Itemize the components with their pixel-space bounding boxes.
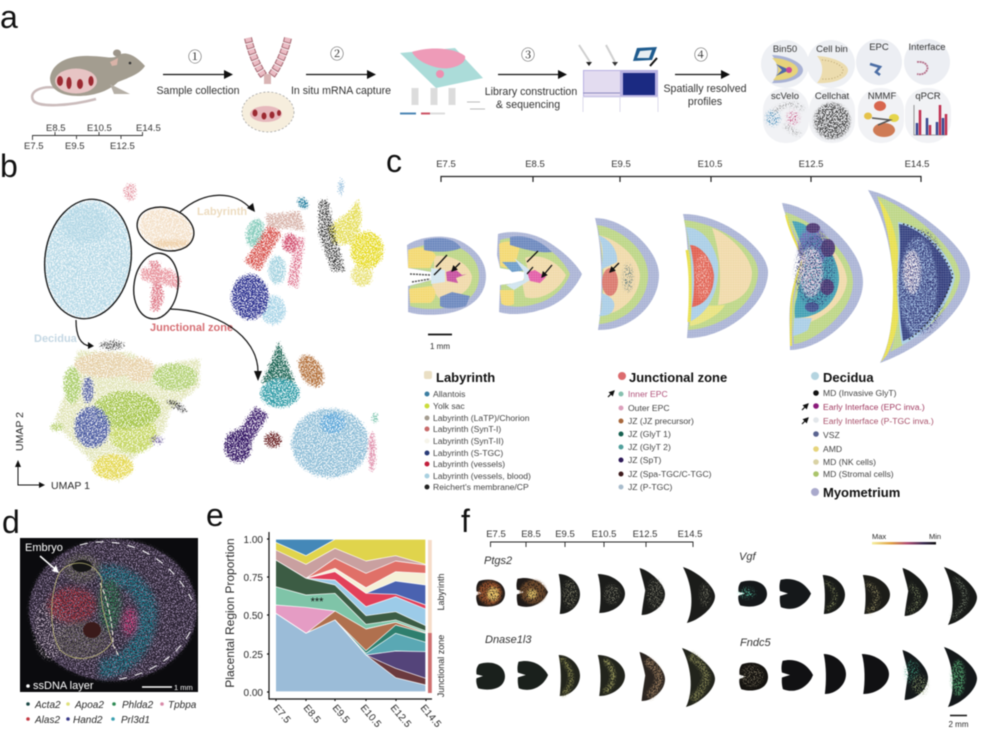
- gene row: Ptgs2: Ptgs2: [484, 555, 512, 567]
- panel: c stage sections: [386, 143, 970, 500]
- image: ssDNA section on black: [20, 538, 198, 692]
- thumbnail: scVelo: [766, 91, 803, 134]
- legend: Decidua and Myometrium: MD (Stromal cells): [823, 469, 894, 479]
- label: Junctional zone: Junctional zone: [150, 322, 233, 334]
- panel letter a: a: [0, 0, 18, 35]
- legend: Labyrinth: Labyrinth (S-TGC): [433, 448, 503, 458]
- thumbnail: Bin50: Bin50: [773, 44, 797, 55]
- axes and ticks: 0.00: [244, 688, 263, 699]
- thumbnail: Cell bin: Cell bin: [816, 44, 848, 55]
- legend: Labyrinth: [424, 370, 531, 492]
- scale bar 2 mm: 2 mm: [948, 720, 969, 729]
- umap: main overview: [35, 180, 201, 326]
- timeline bracket: E7.5: [486, 529, 506, 540]
- legend: Labyrinth: Labyrinth (SynT-I): [433, 424, 501, 434]
- timeline of embryonic days: E9.5: [65, 141, 85, 152]
- step 3 arrow: Library construction: [485, 86, 577, 98]
- timeline of embryonic days: E10.5: [87, 123, 112, 134]
- gene row: Dnase1l3: Dnase1l3: [485, 634, 532, 646]
- region strips: Junctional zone: [436, 635, 446, 697]
- scale bar 2 mm: [948, 716, 969, 729]
- thumbnail: NMMF: [864, 91, 899, 137]
- thumbnail: qPCR bar chart: qPCR: [915, 91, 941, 102]
- legend: Decidua and Myometrium: Decidua: [823, 370, 874, 385]
- gene row: Fndc5: Fndc5: [740, 637, 771, 649]
- step 1 arrow: Sample collection: [156, 85, 240, 97]
- region strips: [428, 540, 446, 697]
- section E14.5: [868, 190, 970, 363]
- panel: e stacked area chart: [206, 497, 446, 730]
- axes and ticks: E12.5: [388, 703, 413, 730]
- thumbnail: Interface: [909, 42, 945, 74]
- step 4 arrow: [663, 48, 747, 108]
- legend: Decidua and Myometrium: [802, 370, 934, 500]
- significance stars: ***: [311, 596, 324, 608]
- timeline bracket: E8.5: [525, 159, 545, 170]
- section E7.5: [407, 237, 486, 315]
- umap: decidua clusters: [48, 338, 202, 487]
- panel: d spatial section: [2, 504, 198, 726]
- timeline bracket: E8.5: [521, 529, 541, 540]
- legend: Junctional zone: Inner EPC: [628, 389, 668, 399]
- axes and ticks: E8.5: [301, 703, 323, 726]
- legend: gene markers: Alas2: [34, 715, 60, 726]
- legend: Junctional zone: JZ (Spa-TGC/C-TGC): [628, 469, 712, 479]
- legend: Labyrinth: Yolk sac: [433, 401, 465, 411]
- legend: Junctional zone: [608, 370, 727, 492]
- scale bar: 1 mm: [174, 683, 193, 692]
- thumbnail: Interface: Interface: [909, 42, 945, 53]
- spatial profile thumbnails: [761, 39, 951, 143]
- gene row: Vgf: [738, 551, 977, 625]
- legend: Junctional zone: Outer EPC: [628, 403, 670, 413]
- section E9.5: [595, 218, 659, 330]
- section E12.5: [782, 203, 863, 350]
- timeline bracket: E12.5: [799, 159, 823, 170]
- legend: Decidua and Myometrium: VSZ: [823, 430, 840, 440]
- legend: Junctional zone: JZ (GlyT 1): [628, 429, 671, 439]
- legend: Labyrinth: Labyrinth (SynT-II): [433, 436, 504, 446]
- legend: Junctional zone: JZ (GlyT 2): [628, 442, 671, 452]
- panel: b UMAP: [0, 148, 386, 492]
- timeline bracket: E9.5: [611, 159, 631, 170]
- section E10.5: [683, 214, 768, 338]
- timeline bracket: E10.5: [698, 159, 722, 170]
- axes and ticks: [244, 532, 443, 730]
- scale bar 1 mm: 1 mm: [430, 342, 450, 351]
- thumbnail: Bin50: [772, 44, 803, 83]
- colour scale: Min: [929, 532, 941, 541]
- legend: gene markers: Prl3d1: [121, 715, 150, 726]
- axes and ticks: E7.5: [271, 703, 293, 726]
- icon: uterus: [248, 38, 288, 84]
- curved arrow to decidua umap: [76, 320, 94, 349]
- step 4 arrow: Spatially resolved: [663, 83, 747, 95]
- legend: gene markers: Apoa2: [74, 700, 104, 711]
- scale bar: [142, 683, 193, 692]
- timeline bracket: E9.5: [555, 529, 575, 540]
- step 3 arrow: & sequencing: [496, 99, 560, 111]
- label: Decidua: Decidua: [34, 333, 78, 345]
- label: Embryo with arrow: [25, 542, 63, 573]
- timeline of embryonic days: E7.5: [24, 141, 44, 152]
- timeline of embryonic days: [24, 123, 161, 152]
- legend: gene markers: [26, 700, 197, 726]
- stacked areas: [276, 539, 426, 692]
- timeline bracket: E7.5: [436, 159, 456, 170]
- axes and ticks: E14.5: [418, 703, 443, 730]
- legend: Decidua and Myometrium: Early Interface (P-TGC inva.): [823, 416, 934, 426]
- curved arrow to labyrinth umap: [180, 195, 255, 212]
- thumbnail: Cell bin: [816, 44, 848, 83]
- legend: Labyrinth: Labyrinth (LaTP)/Chorion: [433, 413, 530, 423]
- thumbnail: NMMF: NMMF: [868, 91, 896, 102]
- timeline bracket: [436, 159, 929, 182]
- panel letter f: f: [461, 503, 470, 539]
- legend: Labyrinth: Reichert's membrane/CP: [433, 482, 529, 492]
- step 3 arrow: [485, 48, 577, 111]
- thumbnail: EPC: EPC: [869, 42, 889, 53]
- panel letter c: c: [386, 143, 402, 179]
- step 4 arrow: ④: [694, 48, 708, 64]
- step 3 arrow: ③: [521, 48, 535, 64]
- label: Embryo with arrow: Embryo: [25, 542, 63, 554]
- label: Labyrinth: Labyrinth: [197, 206, 247, 218]
- colour scale: [872, 532, 941, 544]
- panel letter d: d: [2, 504, 20, 540]
- label: ssDNA layer: ssDNA layer: [33, 680, 94, 692]
- timeline of embryonic days: E14.5: [136, 123, 161, 134]
- panel letter b: b: [0, 148, 18, 184]
- step 2 arrow: In situ mRNA capture: [291, 85, 391, 97]
- axes and ticks: 0.50: [244, 611, 263, 622]
- icon: sequencing kit: [579, 45, 658, 112]
- timeline bracket: [486, 529, 702, 547]
- scale bar 1 mm: [428, 334, 452, 351]
- thumbnail: qPCR bar chart: [914, 91, 947, 135]
- curved arrow to junctional zone umap: [170, 309, 262, 381]
- gene row: Ptgs2: [476, 555, 715, 623]
- legend: Junctional zone: JZ (P-TGC): [628, 482, 673, 492]
- legend: Decidua and Myometrium: MD (Invasive GlyT): [823, 388, 897, 398]
- umap axes: [14, 412, 90, 492]
- umap: labyrinth clusters: [229, 176, 386, 327]
- step 2 arrow: [291, 47, 391, 97]
- step 2 arrow: ②: [330, 47, 344, 63]
- colour scale: Max: [872, 532, 886, 541]
- gene row: Dnase1l3: [476, 634, 715, 707]
- gene row: Fndc5: [739, 637, 977, 707]
- axes and ticks: E10.5: [358, 703, 383, 730]
- region strips: Labyrinth: [436, 573, 446, 611]
- timeline bracket: E10.5: [592, 529, 616, 540]
- y-axis title: Placental Region Proportion: [223, 538, 237, 688]
- thumbnail: Cellchat: Cellchat: [815, 91, 850, 102]
- thumbnail: Cellchat: [814, 91, 850, 139]
- timeline of embryonic days: E8.5: [46, 123, 66, 134]
- legend: gene markers: Acta2: [34, 700, 61, 711]
- legend: gene markers: Phlda2: [122, 700, 154, 711]
- icon: dissected placenta dish: [242, 92, 294, 132]
- legend: Labyrinth: Labyrinth: [436, 370, 495, 385]
- step 1 arrow: [156, 50, 240, 97]
- legend: Labyrinth: Labyrinth (vessels): [433, 459, 505, 469]
- timeline of embryonic days: E12.5: [110, 141, 135, 152]
- icon: pregnant mouse: [32, 50, 145, 105]
- legend: Labyrinth: Allantois: [433, 389, 465, 399]
- step 1 arrow: ①: [188, 50, 202, 66]
- panel: a workflow: [0, 0, 951, 152]
- legend: Labyrinth: Labyrinth (vessels, blood): [433, 471, 531, 481]
- legend: Decidua and Myometrium: AMD: [823, 444, 842, 454]
- timeline bracket: E14.5: [905, 159, 929, 170]
- legend: gene markers: Hand2: [73, 715, 103, 726]
- gene row: Vgf: Vgf: [739, 551, 756, 563]
- legend: gene markers: Tpbpa: [168, 700, 197, 711]
- panel: f gene expression: [461, 503, 977, 729]
- umap axes: UMAP 2: [14, 412, 26, 451]
- timeline bracket: E12.5: [633, 529, 657, 540]
- legend: Decidua and Myometrium: Myometrium: [823, 485, 900, 500]
- section E8.5: [497, 232, 582, 314]
- panel letter e: e: [206, 497, 224, 533]
- legend: Junctional zone: JZ (SpT): [628, 455, 662, 465]
- step 4 arrow: profiles: [688, 96, 722, 108]
- legend: Junctional zone: Junctional zone: [629, 370, 727, 385]
- thumbnail: scVelo: scVelo: [771, 91, 799, 102]
- umap: junctional zone clusters: [222, 336, 380, 480]
- axes and ticks: 0.25: [244, 650, 263, 661]
- axes and ticks: 1.00: [244, 535, 263, 546]
- timeline bracket: E14.5: [678, 529, 702, 540]
- axes and ticks: 0.75: [244, 573, 263, 584]
- icon: capture chip: [400, 48, 485, 114]
- axes and ticks: E9.5: [330, 703, 352, 726]
- legend: Decidua and Myometrium: MD (NK cells): [823, 457, 876, 467]
- legend: Decidua and Myometrium: Early Interface (EPC inva.): [823, 402, 925, 412]
- legend: Junctional zone: JZ (JZ precursor): [628, 416, 694, 426]
- thumbnail: EPC: [869, 42, 889, 75]
- umap axes: UMAP 1: [51, 480, 90, 492]
